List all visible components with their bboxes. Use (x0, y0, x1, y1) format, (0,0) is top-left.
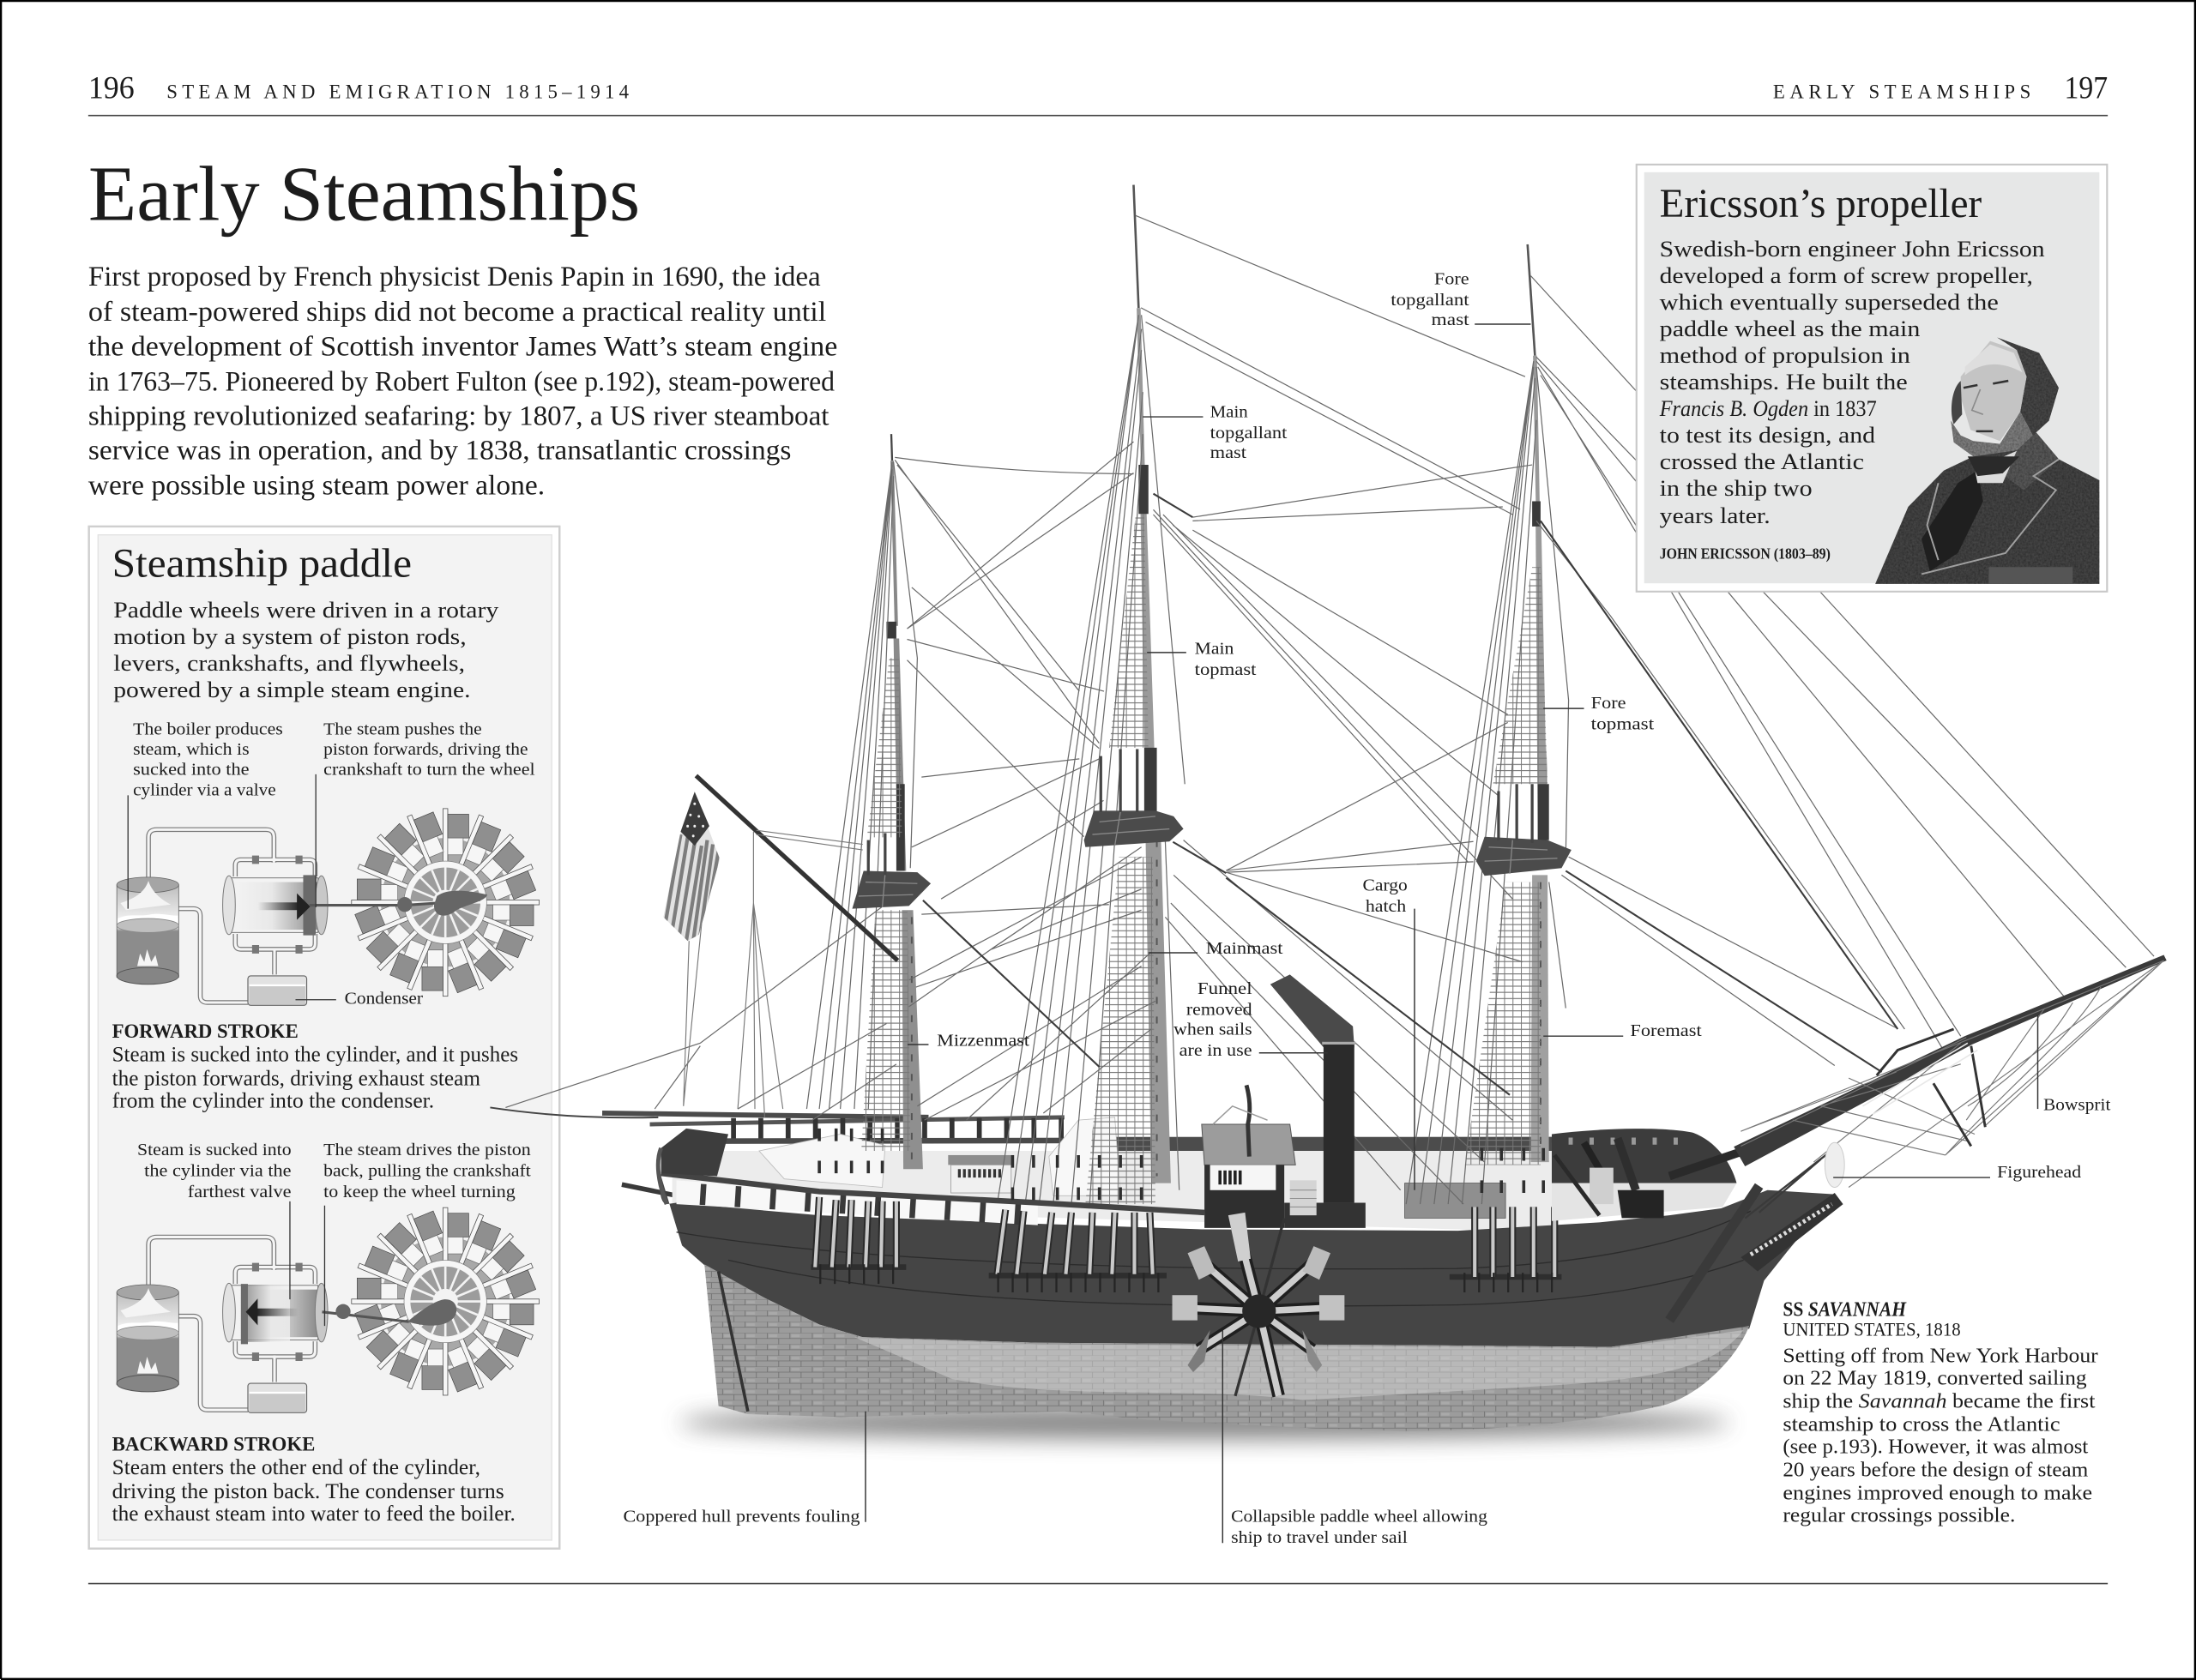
ship description: on 22 May 1819, converted sailing (1783, 1367, 2087, 1390)
ship name: SS SAVANNAH (1783, 1298, 1907, 1322)
label: main topmast: topmast (1195, 660, 1257, 679)
rigging: thin stays and shrouds (505, 215, 2154, 1204)
label: farthest valve: Steam is sucked into (137, 1141, 292, 1159)
label: boiler: steam, which is (133, 740, 250, 759)
panel text: method of propulsion in (1660, 342, 1910, 368)
paddle deckhouse (1202, 1085, 1295, 1228)
ship description: regular crossings possible. (1783, 1504, 2015, 1527)
label: boiler (133, 720, 283, 799)
portrait: John Ericsson (1875, 337, 2099, 584)
intro paragraph: First proposed by French physicist Denis Papin in 1690, the idea (88, 262, 821, 292)
label: collapsible paddle wheel: ship to travel under sail (1231, 1528, 1408, 1547)
masts (886, 185, 1549, 1183)
label: mainmast: Mainmast (1206, 939, 1283, 958)
diagram: forward stroke engine (117, 774, 541, 1005)
label: farthest valve: the cylinder via the (144, 1161, 292, 1180)
intro paragraph: were possible using steam power alone. (88, 470, 545, 501)
flag: stars and stripes (663, 792, 720, 941)
ratlines (861, 514, 1547, 1204)
panel text: years later. (1660, 503, 1771, 528)
forward stroke caption: from the cylinder into the condenser. (112, 1088, 434, 1112)
arrow backward (246, 1298, 257, 1325)
running header (88, 69, 2108, 116)
label: fore topmast: Fore (1591, 694, 1626, 713)
rigging: heavy stays (923, 494, 1897, 1095)
label: foremast: Foremast (1630, 1021, 1702, 1040)
panel: Ericsson's propeller (1637, 165, 2107, 592)
hull: copper sheathing (704, 1264, 1749, 1431)
left running title: STEAM AND EMIGRATION 1815–1914 (166, 81, 630, 102)
label: funnel (1173, 979, 1328, 1060)
label: steam pushes piston: The steam pushes the (323, 720, 482, 738)
front rail with windows (658, 1129, 1204, 1225)
label: bowsprit: Bowsprit (2043, 1096, 2111, 1115)
forward stroke caption: Steam is sucked into the cylinder, and it pushes (112, 1043, 518, 1067)
title: Early Steamships (88, 150, 640, 237)
ship description: steamship to cross the Atlantic (1783, 1413, 2060, 1436)
label: fore topgallant mast: mast (1432, 310, 1469, 329)
label: fore topgallant mast: Fore (1434, 269, 1469, 288)
label: steam pushes piston: crankshaft to turn the wheel (323, 761, 535, 780)
ship: SS Savannah model (490, 185, 2167, 1439)
label: steam drives piston: to keep the wheel turning (323, 1183, 516, 1201)
label: figurehead: Figurehead (1997, 1163, 2081, 1182)
label: boiler: cylinder via a valve (133, 780, 276, 799)
label: funnel: Funnel (1198, 979, 1252, 998)
paddle wheel backward (350, 1206, 541, 1397)
bowsprit (1734, 954, 2167, 1166)
panel intro text: Paddle wheels were driven in a rotary (113, 598, 498, 623)
left folio: 196 (88, 69, 135, 105)
ship description: 20 years before the design of steam (1783, 1459, 2088, 1482)
hull upper dark planking (660, 1176, 1835, 1347)
ship description: (see p.193). However, it was almost (1783, 1436, 2088, 1459)
label: farthest valve (137, 1141, 292, 1201)
label: cargo hatch: Cargo (1363, 876, 1408, 894)
label: boiler: The boiler produces (133, 720, 283, 738)
backward stroke caption (112, 1433, 516, 1526)
label: cargo hatch: hatch (1366, 897, 1406, 916)
deck sails and cabins (759, 1117, 1505, 1218)
label: main topgallant mast: mast (1210, 443, 1247, 462)
label: main topgallant mast: topgallant (1210, 424, 1288, 443)
label: condenser: Condenser (345, 990, 423, 1009)
portrait caption: JOHN ERICSSON (1803–89) (1660, 545, 1831, 563)
flag halyards (684, 830, 863, 1117)
panel text: developed a form of screw propeller, (1660, 262, 2033, 288)
label: farthest valve: farthest valve (188, 1183, 292, 1201)
bow: forecastle (1552, 1129, 1744, 1221)
label: coppered hull: Coppered hull prevents fouling (624, 1508, 860, 1526)
hull plank lines (677, 1211, 1751, 1306)
label: collapsible paddle wheel: Collapsible paddle wheel allowing (1231, 1508, 1487, 1526)
panel text: in the ship two (1660, 475, 1813, 501)
ship origin: UNITED STATES, 1818 (1783, 1319, 1961, 1340)
text block: SS Savannah (1783, 1298, 2098, 1527)
panel text: crossed the Atlantic (1660, 449, 1864, 474)
label: fore topgallant mast: topgallant (1391, 291, 1469, 310)
backward stroke caption: BACKWARD STROKE (112, 1433, 315, 1455)
panel intro text (113, 598, 498, 702)
bow rigging (1741, 960, 2163, 1218)
backward stroke caption: the exhaust steam into water to feed the boiler. (112, 1502, 516, 1526)
label: main topgallant mast: Main (1210, 403, 1248, 422)
label: mizzenmast: Mizzenmast (937, 1032, 1030, 1051)
panel text: which eventually superseded the (1660, 289, 1999, 315)
panel: steamship paddle (89, 527, 559, 1549)
label: collapsible paddle wheel (1222, 1330, 1487, 1547)
label: fore topgallant mast (1391, 269, 1530, 329)
panel text: Francis B. Ogden in 1837 (1659, 395, 1877, 421)
label: funnel: when sails (1173, 1021, 1252, 1039)
funnel (1270, 974, 1366, 1228)
ship description (1783, 1345, 2098, 1527)
panel intro text: motion by a system of piston rods, (113, 624, 467, 649)
forward stroke caption (112, 1021, 518, 1112)
panel text: to test its design, and (1660, 422, 1875, 448)
intro paragraph: the development of Scottish inventor James Watt’s steam engine (88, 332, 837, 363)
label: steam pushes piston: piston forwards, driving the (323, 740, 528, 759)
label: fore topmast: topmast (1591, 715, 1655, 734)
panel intro text: powered by a simple steam engine. (113, 677, 471, 702)
paddle wheel forward (350, 807, 541, 998)
intro paragraph: of steam-powered ships did not become a practical reality until (88, 297, 826, 328)
aft bulwark with windows (731, 1122, 1065, 1135)
forward stroke caption: the piston forwards, driving exhaust steam (112, 1066, 480, 1090)
panel intro text: levers, crankshafts, and flywheels, (113, 651, 465, 676)
ship description: Setting off from New York Harbour (1783, 1345, 2098, 1368)
panel heading: Steamship paddle (112, 542, 412, 587)
deck (673, 1151, 1554, 1232)
label: boiler: sucked into the (133, 761, 250, 780)
label: main topmast (1147, 639, 1257, 679)
label: funnel: removed (1186, 1001, 1252, 1020)
label: cargo hatch (1363, 876, 1415, 1190)
label: fore topmast (1543, 694, 1655, 734)
diagram: backward stroke engine (117, 1201, 541, 1412)
label: funnel: are in use (1179, 1041, 1252, 1060)
label: main topmast: Main (1195, 639, 1234, 658)
intro paragraph (88, 262, 837, 501)
aft boom and spars (490, 1107, 1065, 1201)
panel heading: Ericsson’s propeller (1660, 182, 1982, 226)
label: steam drives piston: The steam drives the piston (323, 1141, 531, 1159)
intro paragraph: shipping revolutionized seafaring: by 1807, a US river steamboat (88, 401, 830, 432)
hull ground shadow (679, 1406, 1729, 1439)
label: bowsprit (2038, 1015, 2111, 1115)
right folio: 197 (2065, 69, 2108, 105)
label: steam drives piston: back, pulling the crankshaft (323, 1161, 531, 1180)
figurehead and trail board (1669, 1142, 1844, 1321)
panel text: paddle wheel as the main (1660, 316, 1920, 341)
forward stroke caption: FORWARD STROKE (112, 1021, 299, 1043)
intro paragraph: in 1763–75. Pioneered by Robert Fulton (see p.192), steam-powered (88, 367, 835, 398)
ship description: engines improved enough to make (1783, 1482, 2092, 1505)
backward stroke caption: driving the piston back. The condenser turns (112, 1479, 504, 1503)
mast tops: platforms (852, 749, 1572, 909)
right running title: EARLY STEAMSHIPS (1773, 81, 2030, 102)
arrow forward (297, 894, 311, 920)
backward stroke caption: Steam enters the other end of the cylinder, (112, 1455, 480, 1479)
label: steam pushes piston (323, 720, 535, 780)
panel text: steamships. He built the (1660, 369, 1908, 394)
intro paragraph: service was in operation, and by 1838, transatlantic crossings (88, 436, 791, 467)
panel text: Swedish-born engineer John Ericsson (1660, 236, 2045, 262)
ship description: ship the Savannah became the first (1783, 1390, 2096, 1413)
label: steam drives piston (323, 1141, 531, 1201)
chain plates and channels (811, 1129, 1561, 1283)
label: main topgallant mast (1143, 403, 1288, 462)
paddle wheel (1173, 1213, 1344, 1396)
mizzen gaff (696, 776, 898, 960)
panel text (1659, 236, 2045, 528)
